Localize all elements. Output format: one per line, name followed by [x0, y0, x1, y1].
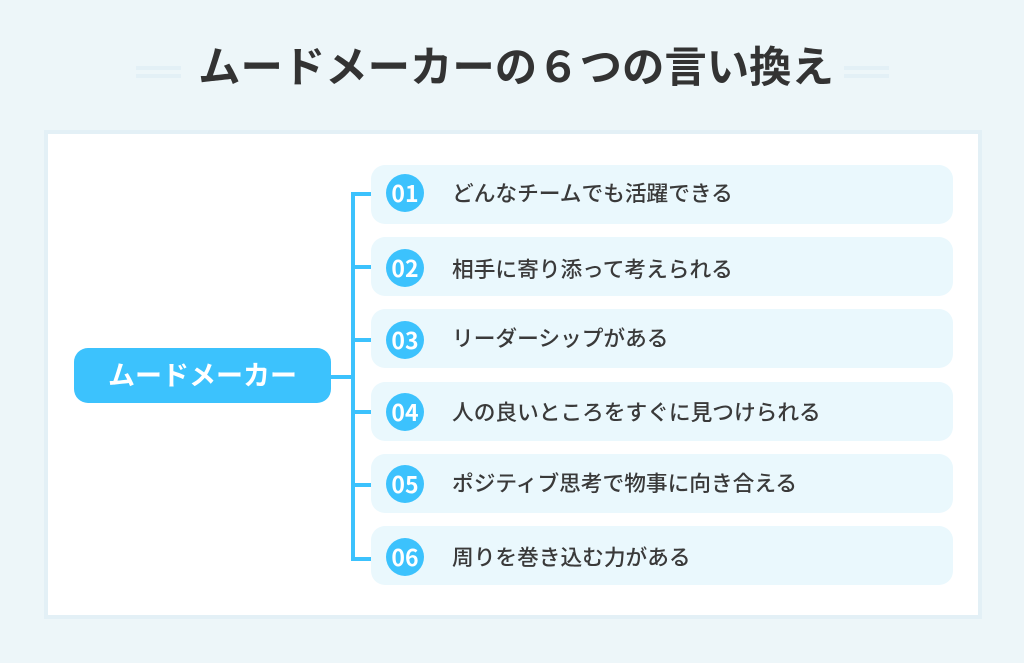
number 05 [386, 465, 424, 503]
title: ムードメーカーの６つの言い換え [198, 44, 834, 91]
number 06 [386, 538, 424, 576]
number 01: 01 [391, 175, 419, 209]
central label: ムードメーカー [108, 361, 297, 391]
number 02: 02 [391, 250, 419, 284]
number 05: 05 [391, 466, 419, 500]
text 05: ポジティブ思考で物事に向き合える [452, 471, 797, 496]
item 03 [371, 309, 953, 368]
number 03 [386, 321, 424, 359]
text 04: 人の良いところをすぐに見つけられる [452, 400, 821, 425]
number 01 [386, 174, 424, 212]
item 06 [371, 526, 953, 585]
number 02 [386, 249, 424, 287]
panel: main diagram [44, 130, 982, 619]
text 06: 周りを巻き込む力がある [452, 545, 691, 570]
connector lines [331, 192, 371, 561]
text 01: どんなチームでも活躍できる [452, 181, 733, 206]
text 03: リーダーシップがある [452, 326, 668, 351]
number 04: 04 [391, 394, 419, 428]
item 04 [371, 382, 953, 441]
item 02 [371, 237, 953, 296]
number 06: 06 [391, 539, 419, 573]
item 01 [371, 165, 953, 224]
number 03: 03 [391, 322, 419, 356]
number 04 [386, 393, 424, 431]
central label [74, 348, 331, 403]
item 05 [371, 454, 953, 513]
text 02: 相手に寄り添って考えられる [452, 257, 733, 282]
